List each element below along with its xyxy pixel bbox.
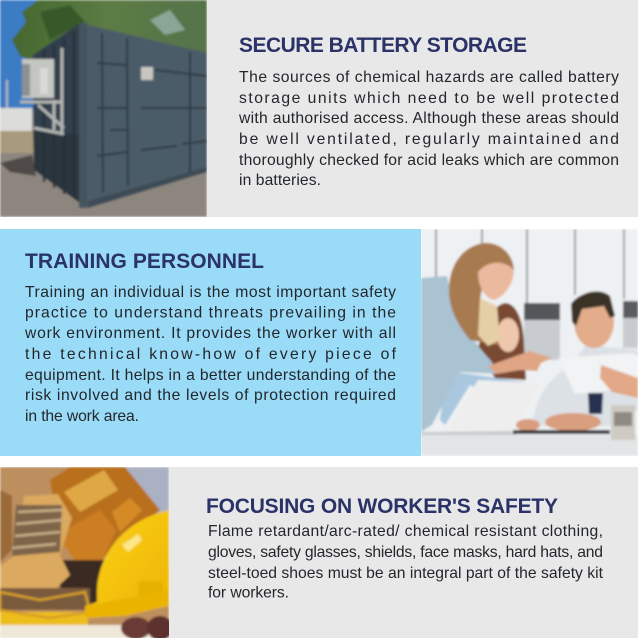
photo: storage container [0, 0, 207, 217]
text: focusing on worker's safety body [208, 523, 604, 602]
text: secure battery storage body [238, 69, 619, 189]
photo: safety boots, tool belt and hard hat [0, 467, 173, 638]
text: focusing on worker's safety body: Flame retardant/arc-rated/ chemical resistant clothing, [208, 523, 603, 540]
photo: team around a laptop [421, 229, 638, 456]
text: training personnel body: work environment. It provides the worker with all [24, 325, 396, 342]
panel: focusing on worker's safety [0, 467, 638, 638]
text: secure battery storage body: storage units which need to be well protected [239, 90, 619, 107]
text: secure battery storage body: thoroughly checked for acid leaks which are common [239, 152, 619, 169]
heading: secure battery storage: SECURE BATTERY STORAGE [239, 34, 527, 57]
heading: training personnel: TRAINING PERSONNEL [25, 250, 264, 273]
text: focusing on worker's safety body: gloves, safety glasses, shields, face masks, hard hats, and [208, 544, 603, 561]
text: focusing on worker's safety body: for workers. [208, 584, 289, 602]
text: secure battery storage body: in batteries. [239, 172, 321, 189]
text: training personnel body: equipment. It helps in a better understanding of the [25, 367, 396, 384]
text: training personnel body: risk involved and the levels of protection required [25, 387, 396, 404]
panel: training personnel [0, 229, 638, 456]
panel: secure battery storage [0, 0, 638, 217]
text: training personnel body: Training an individual is the most important safety [25, 284, 396, 301]
text: training personnel body: practice to understand threats prevailing in the [25, 304, 396, 322]
text: secure battery storage body: The sources of chemical hazards are called battery [239, 69, 619, 86]
text: secure battery storage body: be well ventilated, regularly maintained and [239, 131, 619, 148]
text: training personnel body: the technical know-how of every piece of [25, 346, 397, 363]
heading: focusing on worker's safety: FOCUSING ON WORKER'S SAFETY [206, 495, 558, 518]
text: training personnel body: in the work area. [25, 408, 139, 425]
text: focusing on worker's safety body: steel-toed shoes must be an integral part of the safety kit [208, 565, 604, 582]
text: secure battery storage body: with authorised access. Although these areas should [238, 110, 619, 127]
text: training personnel body [24, 284, 397, 425]
